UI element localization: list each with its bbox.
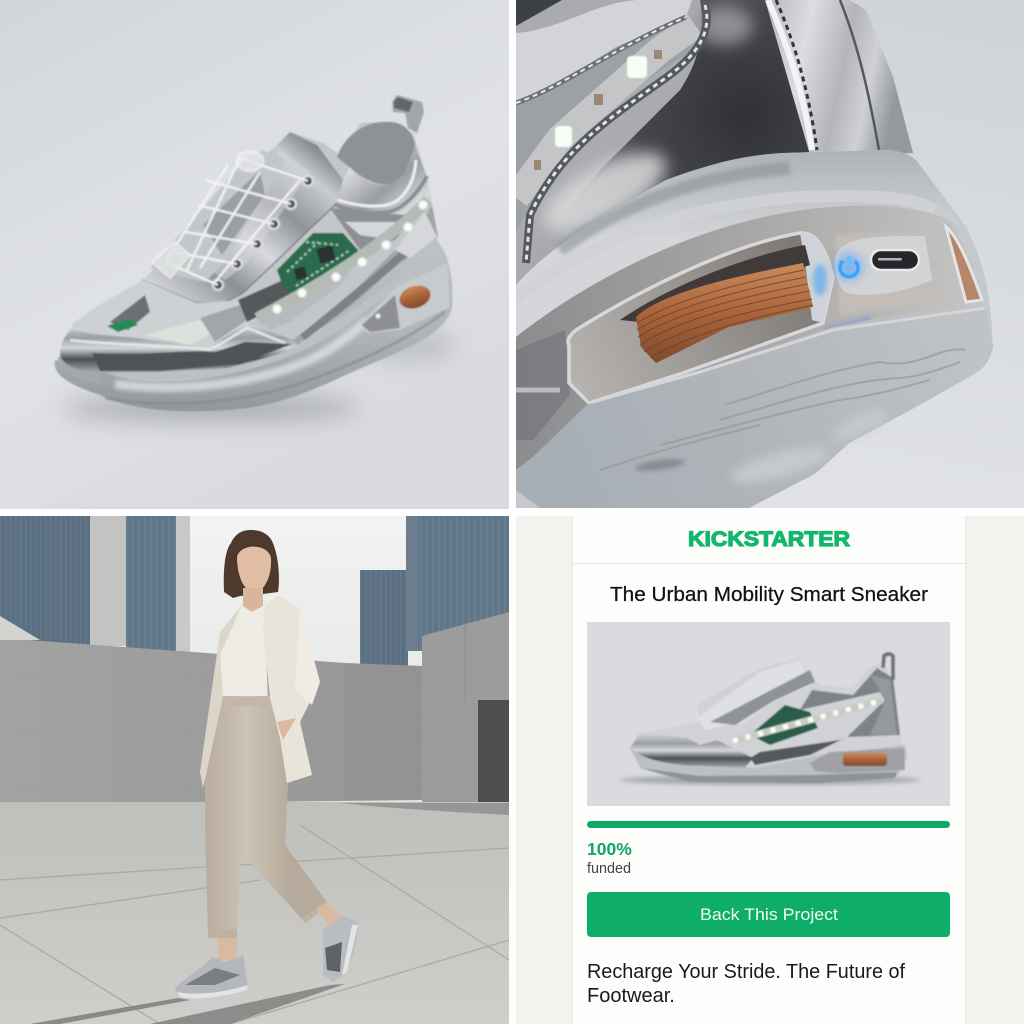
copper coil bbox=[636, 263, 813, 363]
pavement bbox=[0, 802, 509, 1024]
progress bar bbox=[587, 821, 950, 828]
chrome toe bbox=[630, 733, 753, 768]
icon: USB-C port bbox=[871, 250, 919, 270]
icon: transparent laces bbox=[152, 151, 308, 285]
icon: glowing blue power button bbox=[835, 253, 863, 281]
buildings bbox=[0, 516, 509, 670]
icon: translucent heel sole bbox=[516, 150, 993, 508]
hair bbox=[224, 530, 279, 598]
stat: 100% funded bbox=[587, 839, 632, 877]
transparent window bbox=[516, 206, 985, 470]
sole rim band bbox=[516, 150, 960, 337]
dark lower panel bbox=[750, 737, 847, 765]
icon: transparent chrome sneaker bbox=[55, 95, 452, 411]
heel chrome quarter bbox=[340, 149, 430, 214]
silver shoes bbox=[175, 955, 248, 998]
concrete walls bbox=[0, 612, 509, 805]
collar lining bbox=[337, 122, 415, 185]
tagline: Recharge Your Stride. The Future of bbox=[587, 960, 905, 983]
chrome toe bumper bbox=[60, 323, 298, 373]
icon: LED strip bbox=[516, 25, 695, 198]
trousers bbox=[205, 696, 327, 938]
blazer left panel bbox=[200, 605, 242, 788]
see-through lace area bbox=[150, 150, 285, 282]
tagline bbox=[587, 960, 905, 1007]
pull tab bbox=[392, 95, 424, 133]
USB surround bbox=[835, 236, 932, 295]
circuit board bbox=[750, 705, 818, 745]
face and neck bbox=[237, 547, 271, 592]
right window with copper bbox=[946, 227, 982, 302]
panel: studio shot of the sneaker bbox=[0, 0, 509, 509]
project image bbox=[587, 622, 950, 806]
midfoot interior bbox=[238, 280, 293, 322]
panel: Kickstarter campaign page bbox=[516, 516, 1024, 1024]
air capsule bbox=[568, 233, 833, 403]
figure: woman in blazer and beige trousers bbox=[175, 530, 358, 998]
panel: heel close-up bbox=[516, 0, 1024, 508]
panel: lifestyle photo of woman walking bbox=[0, 516, 509, 1024]
midsole bbox=[630, 745, 907, 782]
icon: eyelets bbox=[213, 176, 313, 290]
lace panel chrome stay bbox=[142, 132, 343, 303]
sole unit bbox=[55, 238, 452, 411]
heel chrome bbox=[800, 668, 900, 737]
icon: chrome upper bbox=[516, 0, 913, 300]
upper body bbox=[68, 122, 424, 340]
button: back this project: Back This Project bbox=[700, 905, 838, 924]
ankles bbox=[217, 938, 237, 960]
quarter window behind LED strip bbox=[330, 208, 404, 250]
icon: heel air unit with copper coil bbox=[360, 263, 450, 333]
blazer right panel bbox=[263, 595, 320, 783]
white top bbox=[220, 605, 268, 700]
stitched seams bbox=[516, 0, 879, 263]
outsole bbox=[516, 307, 993, 508]
transparent toe box bbox=[70, 280, 270, 347]
button: back this project bbox=[587, 892, 950, 937]
icon: green circuit board bbox=[277, 233, 358, 297]
LED strip bbox=[733, 700, 883, 741]
lower quarter panels bbox=[293, 206, 436, 345]
copper coil bbox=[843, 753, 887, 766]
stat: 100% funded: funded bbox=[587, 861, 631, 877]
pull loop bbox=[883, 654, 893, 680]
icon: LED strip bbox=[257, 200, 428, 318]
icon: sneaker side view bbox=[630, 654, 907, 783]
upper bbox=[630, 658, 907, 782]
stat: 100% funded: 100% bbox=[587, 839, 632, 859]
logo: Kickstarter: KICKSTARTER bbox=[688, 528, 850, 551]
hand in pocket bbox=[277, 718, 296, 740]
heading: project title: The Urban Mobility Smart Sneaker bbox=[610, 583, 928, 606]
tagline: Footwear. bbox=[587, 985, 675, 1007]
lace panel bbox=[697, 660, 812, 730]
